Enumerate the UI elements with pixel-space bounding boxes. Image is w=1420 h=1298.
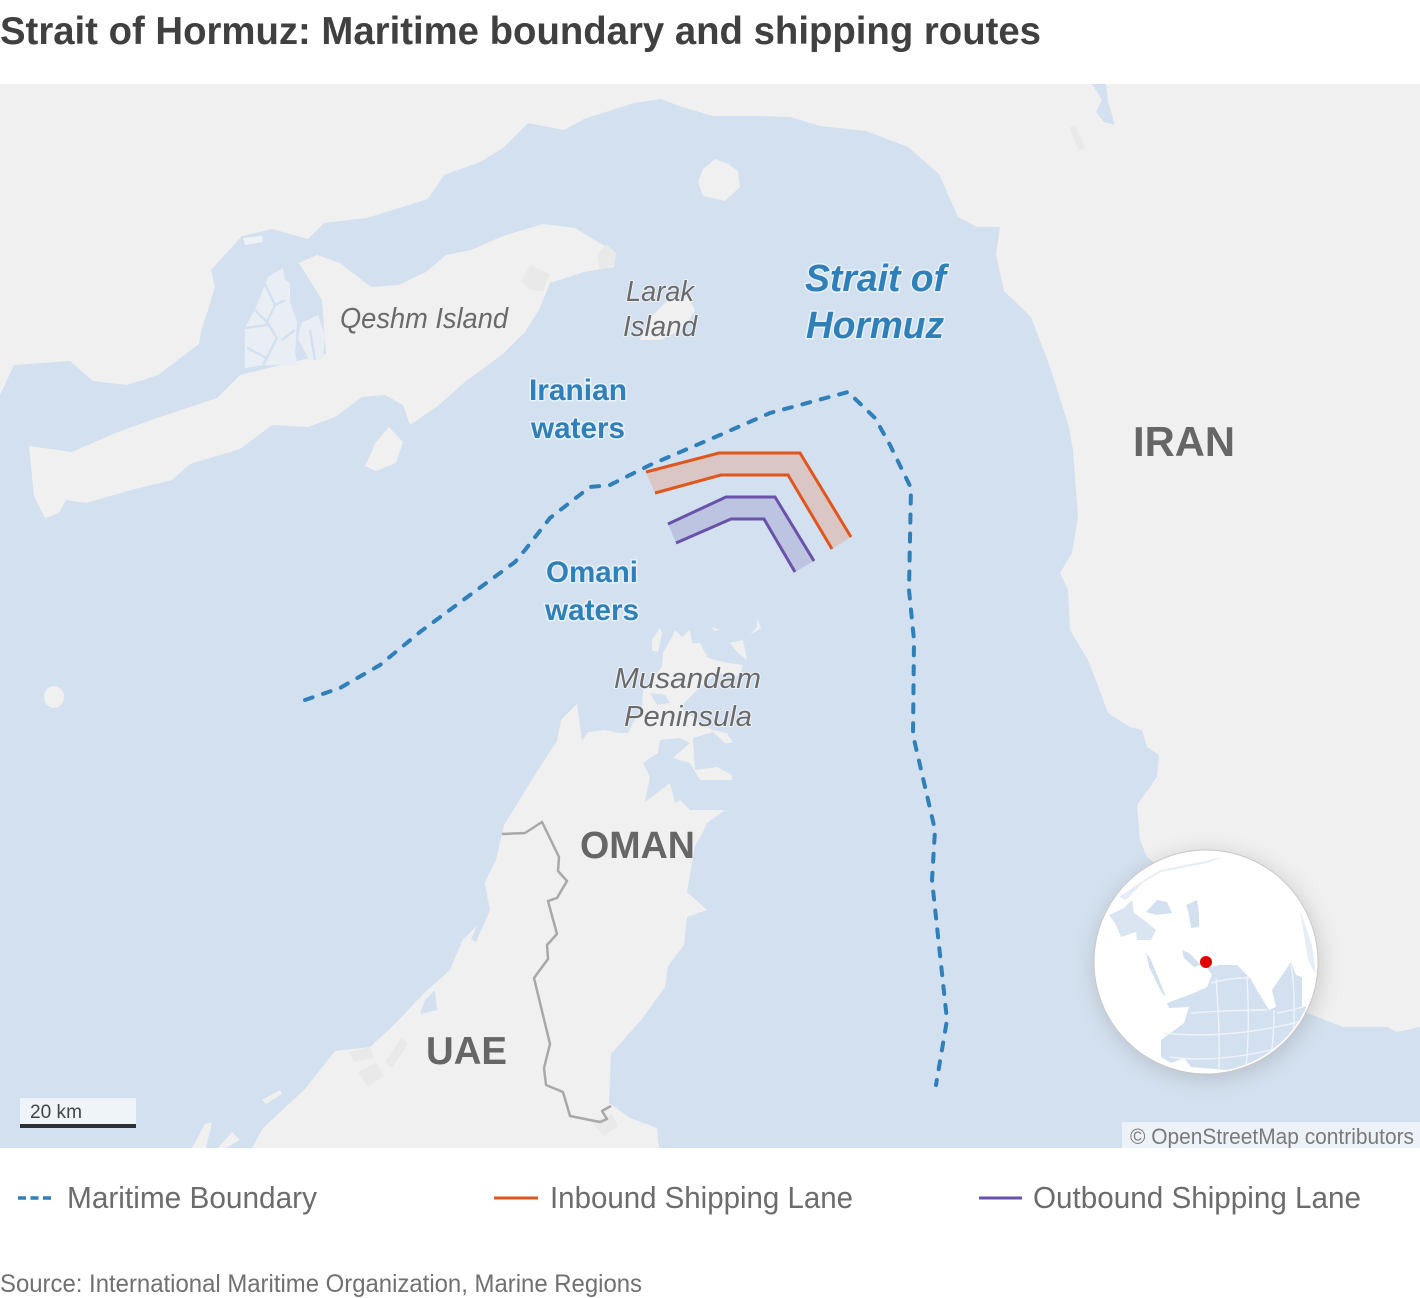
land: Musandam, UAE and Oman <box>251 630 743 1150</box>
globe: Indian Ocean <box>1161 962 1314 1070</box>
urban patches on Qeshm <box>600 245 614 270</box>
mangrove delta, Qeshm <box>245 268 325 368</box>
maritime boundary line <box>305 392 947 1085</box>
label: Strait of Hormuz: Hormuz <box>806 305 944 347</box>
label: Omani waters: Omani <box>546 556 638 589</box>
label: Omani waters: waters <box>544 594 639 627</box>
Musandam lake and islets <box>650 618 761 705</box>
land: Hormuz Island <box>698 159 740 201</box>
islet in the delta mouth <box>243 236 263 245</box>
legend: inbound shipping lane: Inbound Shipping Lane <box>550 1180 853 1215</box>
land: Hengam Island <box>365 427 403 471</box>
globe: location marker <box>1200 956 1212 968</box>
inlets on the UAE coast <box>420 885 490 1014</box>
label: Iranian waters: waters <box>530 412 625 445</box>
label: IRAN: IRAN <box>1133 418 1235 465</box>
border: UAE and Oman <box>502 822 611 1122</box>
inland lake, top right <box>1092 84 1114 125</box>
label: Strait of Hormuz: Strait of <box>805 258 949 300</box>
label: Musandam Peninsula <box>614 667 761 728</box>
label: Musandam Peninsula: Musandam <box>614 663 761 695</box>
inbound shipping lane <box>646 453 851 549</box>
land: small western islet <box>44 686 64 708</box>
globe: Red Sea <box>1146 952 1166 997</box>
land: Larak Island <box>640 297 695 340</box>
land: Iran mainland <box>0 84 1420 1032</box>
legend: maritime boundary: Maritime Boundary <box>67 1180 317 1215</box>
land: Qeshm Island <box>29 224 616 518</box>
globe: Persian Gulf <box>1182 950 1201 967</box>
globe: Caspian Sea <box>1186 900 1199 928</box>
title: Strait of Hormuz: Maritime boundary and shipping routes <box>0 10 1041 53</box>
label: Iranian waters: Iranian <box>529 374 627 407</box>
label: Larak Island <box>623 279 699 338</box>
label: UAE: UAE <box>426 1030 507 1073</box>
label: Strait of Hormuz <box>804 262 950 340</box>
label: Larak Island: Larak <box>626 276 695 308</box>
label: Musandam Peninsula: Peninsula <box>624 701 752 733</box>
attribution: © OpenStreetMap contributors <box>1130 1124 1414 1149</box>
legend: outbound shipping lane: Outbound Shipping Lane <box>1033 1180 1361 1215</box>
scale bar <box>20 1098 136 1128</box>
locator globe <box>1094 850 1322 1080</box>
scale bar: 20 km <box>30 1102 82 1123</box>
globe: graticule <box>1164 965 1308 1068</box>
globe: Arctic coast <box>1119 857 1224 900</box>
label: OMAN: OMAN <box>580 825 695 867</box>
label: Iranian waters <box>530 377 627 440</box>
label: Omani waters <box>544 559 640 622</box>
globe: eastern limb waters <box>1300 910 1316 975</box>
globe: Black Sea <box>1146 900 1172 915</box>
label: Qeshm Island: Qeshm Island <box>340 303 509 335</box>
label: Larak Island: Island <box>623 311 698 343</box>
source note: Source: International Maritime Organization, Marine Regions <box>0 1270 642 1298</box>
urban patches in the UAE <box>349 1037 618 1136</box>
coastal islets, bottom left <box>192 1090 282 1148</box>
outbound shipping lane <box>668 497 814 572</box>
globe: Mediterranean and Europe waters <box>1109 900 1156 940</box>
faint urban patch, top right <box>1069 125 1085 151</box>
